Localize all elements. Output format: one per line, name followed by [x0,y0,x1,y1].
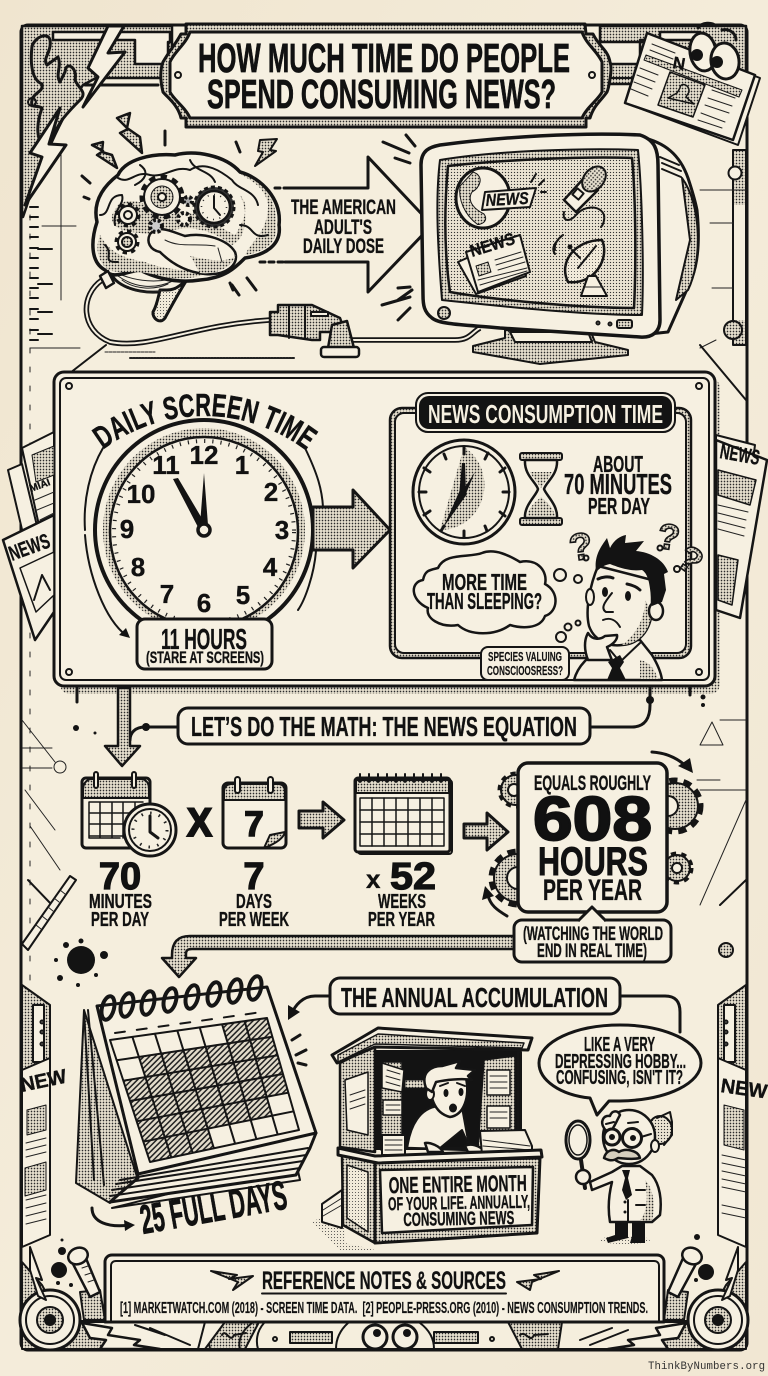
googly eyes [687,23,741,81]
clock numbers: 12 [190,440,218,470]
thermometer ruler [22,876,76,950]
bottom band eyes [363,1325,387,1349]
news kiosk [312,1028,542,1250]
gears around result [482,752,700,916]
gear left [118,205,138,225]
about 70 minutes text: PER DAY [588,493,650,519]
equation term: 52 weeks [366,856,436,931]
clock numbers: 8 [131,552,145,582]
label: 25 full days [92,1172,290,1243]
hand on chin [585,633,617,660]
scientist with magnifier [566,1110,672,1244]
gear lower [117,232,137,252]
clock: 11 hours [84,394,324,670]
icon: globe with news tag [456,168,546,228]
dark window [375,1050,520,1150]
hair [596,535,668,606]
shirt [574,640,662,680]
about 70 minutes text: ABOUT [593,451,643,477]
label: 11 hours [137,619,272,669]
floor shadow [600,1236,650,1244]
result box: 608 hours per year: HOURS [538,840,648,884]
bottom band lightning [82,1323,160,1349]
newspapers left of panel: MIAI [28,477,52,495]
label: species valuing consciousness: CONSCIOOSRESS? [487,664,563,678]
top-left border band [22,26,172,217]
panel screws [66,383,72,389]
arrow: the american adult's daily dose [260,135,432,320]
curved text: daily screen time: DAILY SCREEN TIME [92,394,318,450]
clock numbers: 5 [236,580,250,610]
icon: lightning bolts top left [25,26,125,205]
caption: watching the world end: (WATCHING THE WORLD [523,924,663,945]
equation term: 52 weeks: PER YEAR [368,909,435,931]
gear large [143,178,181,216]
kiosk body [342,1155,375,1243]
ink splat [54,938,108,987]
lower-left border strip [22,985,50,1105]
cloud: more time than sleeping: THAN SLEEPING? [427,588,542,614]
thinking man: ? [670,536,711,583]
connector lines to math heading [130,705,650,740]
equation term: 7 days [219,856,289,931]
arrow: the american adult's daily dose: THE AMERICAN [291,196,396,219]
heading pill [416,393,675,432]
cable and plug [86,271,480,357]
roof [332,1028,532,1063]
face [588,566,652,645]
legs [606,1215,628,1243]
math heading [178,708,590,744]
title text: SPEND CONSUMING NEWS? [207,71,556,117]
stacked papers left [322,1190,342,1228]
outer frame: NEW [18,1066,69,1097]
top-right border band [600,26,746,84]
icon: calendar 7 [223,777,286,848]
plaque: CONSUMING NEWS [403,1208,515,1231]
icon: newspaper: NEWS [468,229,517,261]
outer frame: NEW [719,1075,768,1103]
main panel [52,370,720,694]
clock numbers [120,440,289,618]
ink drips under panel [73,686,706,734]
icon: newspaper [458,229,530,294]
icon: brain with gears [82,113,279,321]
equation term: 52 weeks: x [366,864,381,894]
side wall [340,1045,375,1152]
monitor [421,134,698,364]
thinking man [567,515,711,680]
clock numbers: 2 [264,477,278,507]
equation term: 7 days: DAYS [236,891,272,913]
equation term: 70 minutes: 70 [99,856,141,898]
about 70 minutes text [564,451,672,519]
clock numbers: 1 [235,450,249,480]
result box: 608 hours per year: EQUALS ROUGHLY [534,772,651,795]
title banner [161,24,611,127]
label: species valuing consciousness [481,647,569,680]
result box: 608 hours per year: PER YEAR [543,874,642,907]
face features [598,577,640,590]
casing front [421,134,660,337]
equation term: 70 minutes: PER DAY [91,909,149,931]
big calendar [76,975,316,1208]
arrow: flow to big calendar [162,936,514,977]
reference notes panel [105,1255,664,1322]
caption: watching the world end [514,907,671,962]
right column border [733,150,746,345]
small gears [178,213,190,225]
counter [338,1148,542,1163]
arrow: down from panel [105,688,140,766]
label: 25 full days: 25 FULL DAYS [137,1172,290,1243]
speech bubble: LIKE A VERY [584,1033,655,1056]
icon: year calendar [355,774,452,854]
result box: 608 hours per year: 608 [533,785,652,854]
label: species valuing consciousness: SPECIES VALUING [488,650,562,664]
side test tubes [72,1256,100,1297]
cloud: more time than sleeping: MORE TIME [442,569,527,595]
label: 11 hours: 11 HOURS [161,624,247,656]
clock numbers: 9 [120,514,134,544]
icon: calendar 7: 7 [244,805,264,844]
cerebellum and stem [110,270,190,292]
arrow: the american adult's daily dose: DAILY DOSE [303,235,384,258]
cloud: more time than sleeping [414,551,582,642]
temporal lobe [148,229,236,274]
stacked papers on counter [382,1135,405,1155]
clock overlay [124,804,176,856]
clock numbers: 7 [160,579,174,609]
ink spots [51,1262,67,1278]
newspaper with eyes top right [625,23,760,145]
label: 11 hours: (STARE AT SCREENS) [146,648,264,667]
icon: calendar with clock [82,772,176,856]
caption: watching the world end: END IN REAL TIME) [537,941,647,962]
newspapers right of panel [716,435,767,618]
question marks: ? [567,525,595,570]
plaque: ONE ENTIRE MONTH [389,1170,527,1198]
knob and controls [438,307,450,319]
clock numbers: 11 [152,450,180,480]
lightning icons [211,1271,253,1290]
back stand [76,1010,138,1203]
big halftone arrow [313,490,390,568]
newspapers left of panel [3,432,54,640]
corner diagonals [28,345,746,905]
equation term: 52 weeks: 52 [390,856,436,898]
clock numbers: 6 [197,588,211,618]
result box: 608 hours per year [518,763,667,912]
arrow 1 [299,802,344,838]
lower-left halftone wedge [22,1262,50,1310]
hatched grid [110,1018,299,1162]
plaque [380,1167,533,1233]
lower-right border strip [718,985,746,1105]
heading pill: NEWS CONSUMPTION TIME [428,399,663,429]
brain outline [93,153,279,281]
corner wheels [20,1290,80,1350]
heading: annual accumulation [288,978,680,1032]
clock face [95,420,313,640]
page stack [112,1162,300,1208]
newspaper with eyes top right: N [671,53,687,74]
hourglass [520,453,562,525]
references heading: REFERENCE NOTES & SOURCES [262,1267,506,1295]
panel: news consumption time [390,393,711,680]
icon: satellite dish [553,235,607,296]
screen bezel [437,149,643,315]
equation term: 52 weeks: WEEKS [378,891,426,913]
heading: annual accumulation: THE ANNUAL ACCUMULATION [341,982,608,1013]
clock numbers: 4 [263,552,278,582]
sketch marks under cable [105,352,295,358]
icon: microphone [564,162,611,227]
scared person [407,1061,485,1152]
about 70 minutes text: 70 MINUTES [564,469,672,501]
side lightning outlines [30,1247,46,1300]
clock numbers: 10 [127,479,155,509]
clock numbers: 3 [275,515,289,545]
plaque: OF YOUR LIFE. ANNUALLY, [388,1191,530,1214]
casing back [640,137,698,335]
stand [473,330,628,364]
spiral rings [99,975,264,1021]
bottom border band [22,1321,746,1349]
clock hands [173,478,207,531]
icon: globe with news tag: NEWS [485,189,530,210]
small clock [413,440,515,544]
equation term: 70 minutes [89,856,152,931]
head [648,1116,672,1144]
small sparks [82,113,277,295]
shadow [312,1205,375,1250]
plug body [270,305,345,340]
arrow: the american adult's daily dose: ADULT'S [314,216,372,239]
title text [198,35,570,117]
screen [445,157,635,308]
clock in brain [194,187,234,227]
calendar sheet [97,987,316,1174]
watermark: ThinkByNumbers.org [648,1361,765,1373]
arrow 2 [464,813,508,850]
equation term: 7 days: PER WEEK [219,909,289,931]
magnifying glass [566,1121,590,1159]
equation term: 7 days: 7 [243,856,265,898]
left ruler ticks [29,215,31,1000]
speech bubble [539,1025,701,1115]
coat [590,1166,661,1222]
newspapers left of panel: NEWS [6,530,53,566]
multiply sign: X [187,801,212,845]
equation term: 70 minutes: MINUTES [89,891,152,913]
thinking man: ? [655,515,683,559]
